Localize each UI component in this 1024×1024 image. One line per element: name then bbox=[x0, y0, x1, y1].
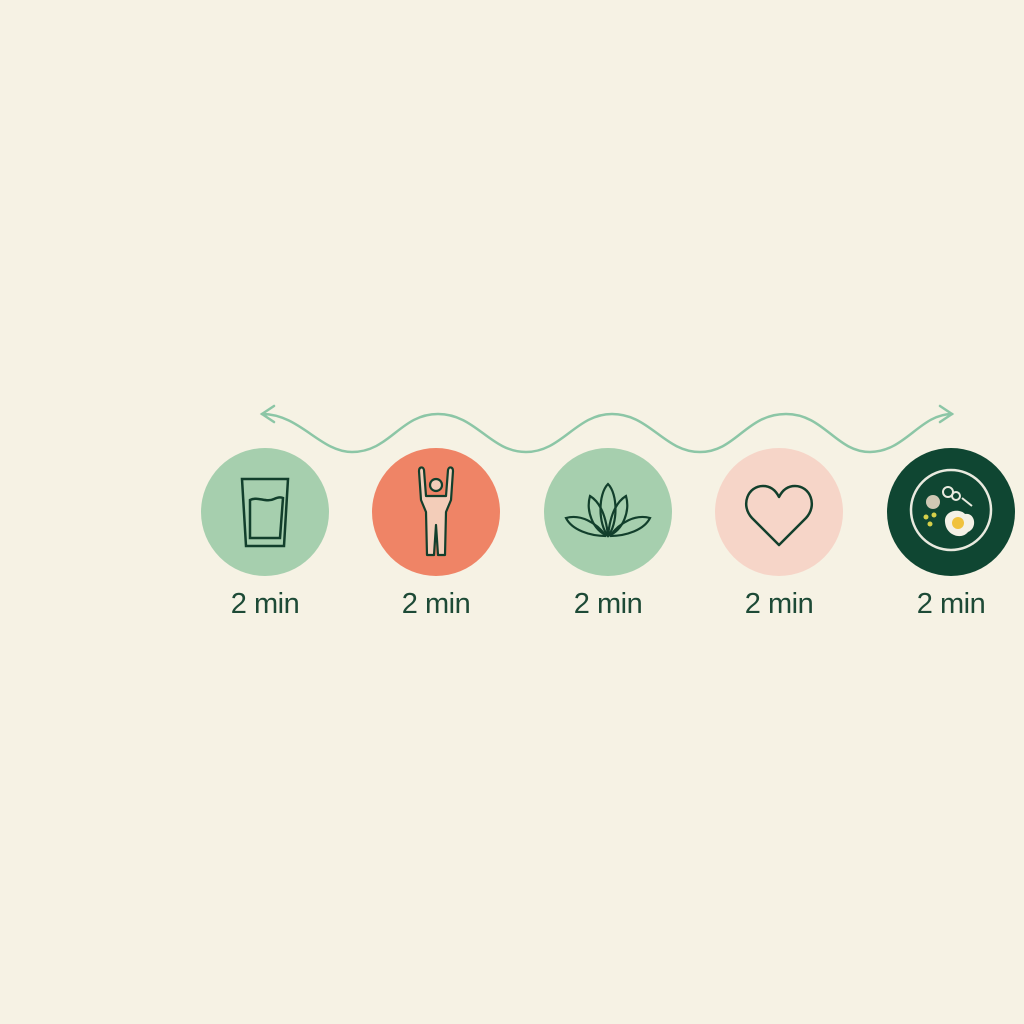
label 1: 2 min bbox=[231, 588, 299, 620]
label 4: 2 min bbox=[745, 588, 813, 620]
arrow: wavy timeline bbox=[262, 406, 952, 452]
step 3: lotus bbox=[544, 448, 672, 576]
label 2: 2 min bbox=[402, 588, 470, 620]
step 2: stretching person bbox=[372, 448, 500, 576]
step 4: heart bbox=[715, 448, 843, 576]
label 3: 2 min bbox=[574, 588, 642, 620]
label 5: 2 min bbox=[917, 588, 985, 620]
step 1: water glass bbox=[201, 448, 329, 576]
step 5: breakfast plate bbox=[887, 448, 1015, 576]
